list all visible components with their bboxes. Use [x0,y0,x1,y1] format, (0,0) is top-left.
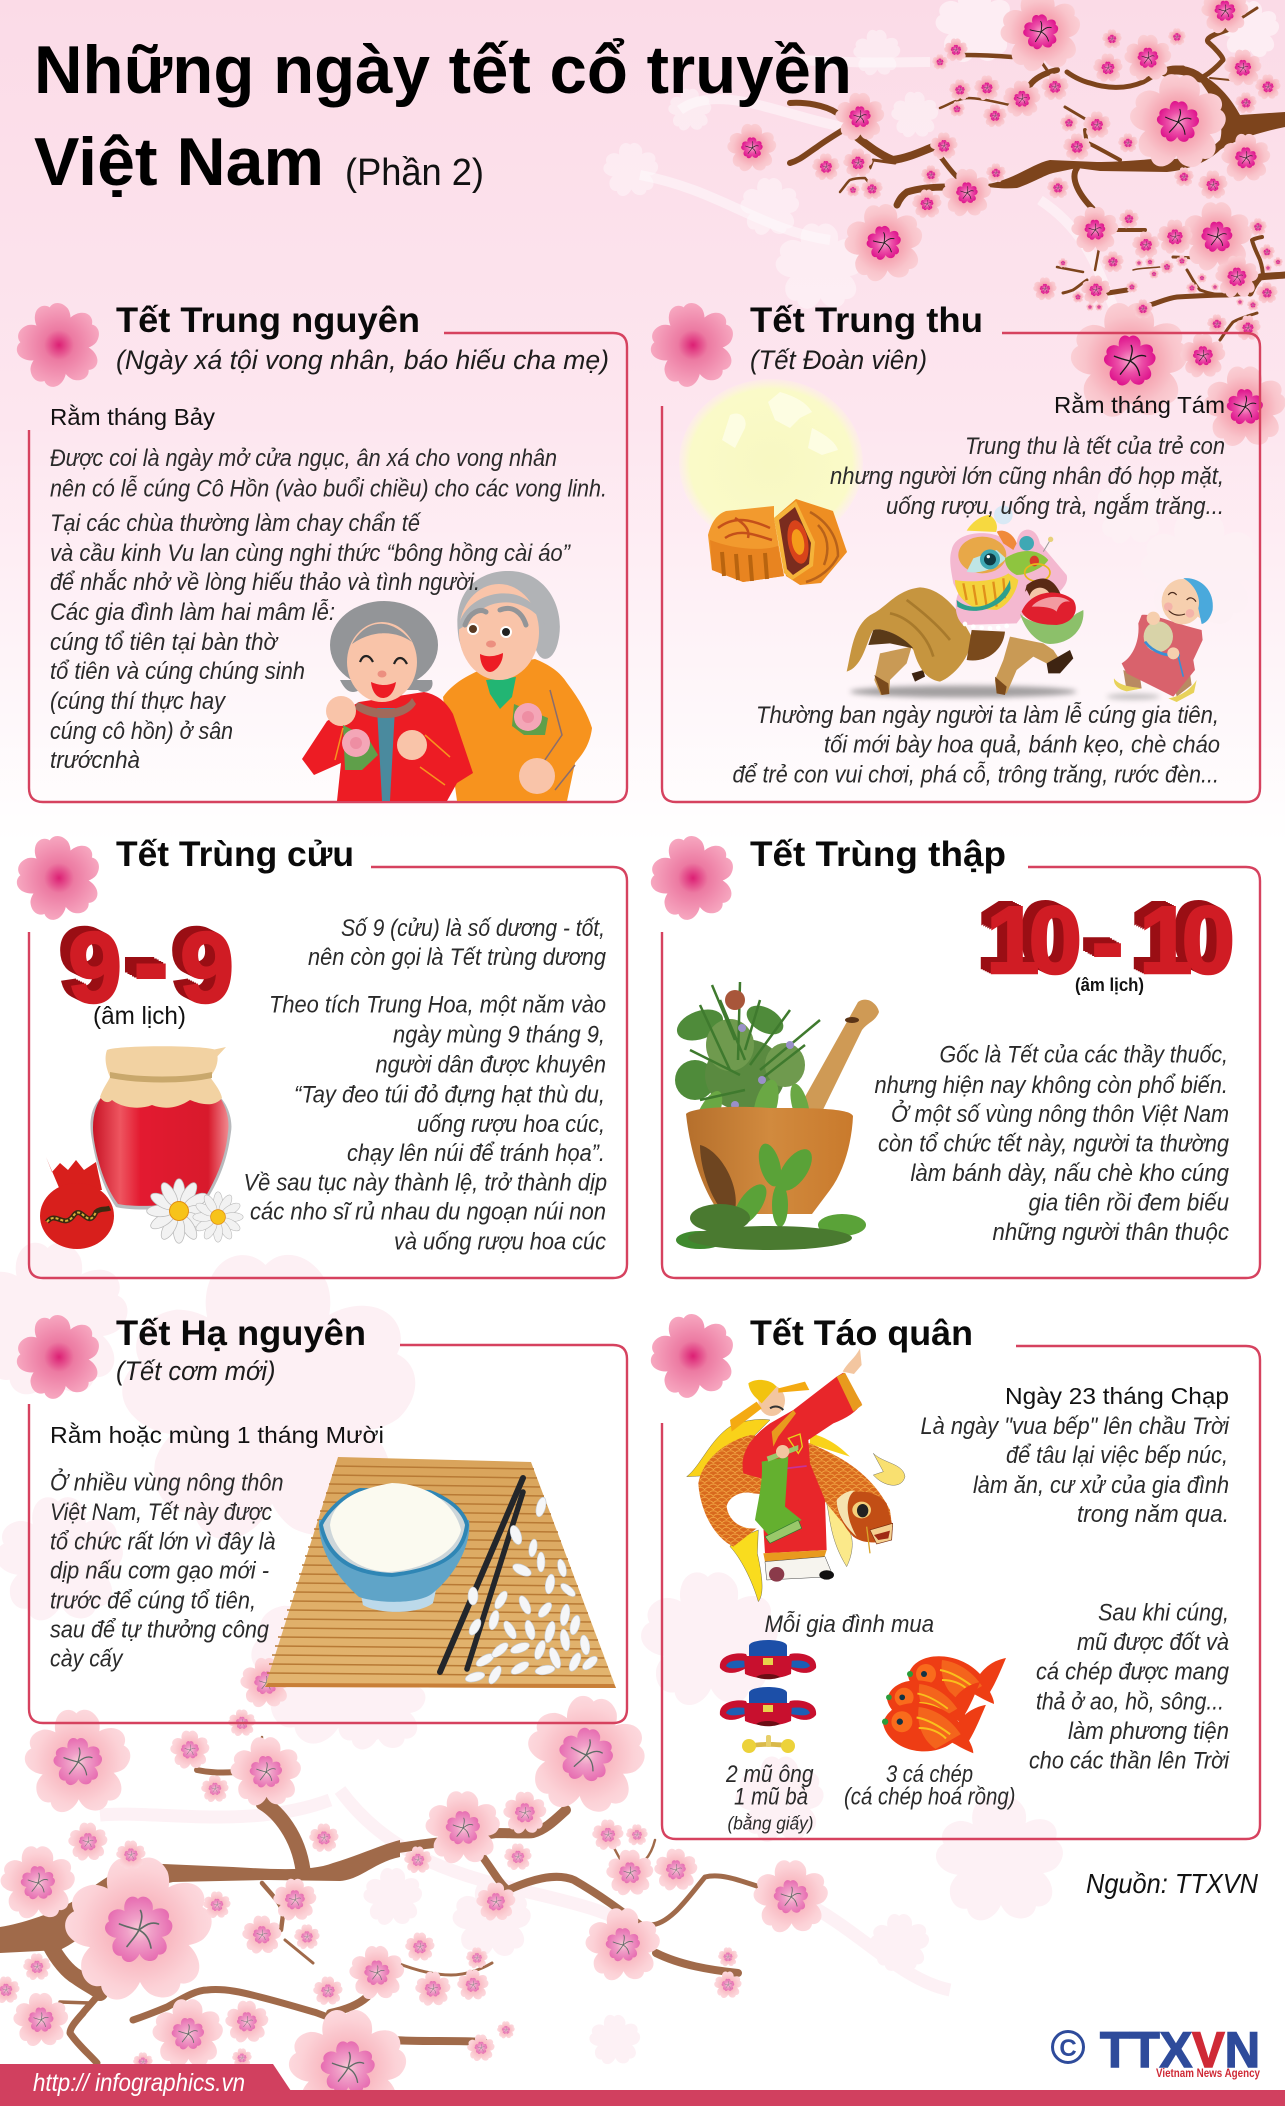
date: Rằm tháng Tám [1054,392,1225,418]
caption: hats [725,1761,814,1834]
panel: Tết Trung nguyên [6,295,627,802]
date: Rằm tháng Bảy [50,404,216,430]
illustration: mooncake [708,499,847,585]
body text: chạy lên núi để tránh họa”. [347,1140,605,1167]
illustration: wine jar [90,1046,231,1210]
body text: Trung thu là tết của trẻ con [965,433,1225,460]
body text: để trẻ con vui chơi, phá cỗ, trông trăng, rước đèn... [732,760,1219,788]
body text: Việt Nam, Tết này được [50,1499,272,1526]
panel: Tết Trùng thập [640,828,1260,1278]
body text: Về sau tục này thành lệ, trở thành dịp [244,1170,607,1196]
body text: trong năm qua. [1077,1501,1229,1528]
icon: paper hats [720,1640,816,1753]
body text: tổ chức rất lớn vì đây là [50,1528,276,1556]
body text: và cầu kinh Vu lan cùng nghi thức “bông hồng cài áo” [50,540,571,567]
caption: hats: 2 mũ ông [725,1761,814,1788]
body text: Là ngày "vua bếp" lên chầu Trời [920,1413,1230,1440]
icon: pink flower [6,295,112,398]
body text: Theo tích Trung Hoa, một năm vào [269,992,606,1018]
big date: 9-9: 9 [180,912,234,1024]
footer url: http:// infographics.vn [33,2069,245,2097]
icon: pink flower [640,828,746,931]
body text: Các gia đình làm hai mâm lễ: [50,598,335,626]
body text: còn tổ chức tết này, người ta thường [878,1130,1230,1158]
body text: (cúng thí thực hay [50,688,227,715]
body text: nhưng người lớn cũng nhân đó họp mặt, [830,463,1224,490]
panel: Tết Táo quân [640,1306,1260,1839]
body text: uống rượu hoa cúc, [417,1111,605,1138]
big date: 9-9: - [132,888,170,1034]
illustration: herbs in mortar [673,982,879,1250]
source: Nguồn: TTXVN [1086,1868,1259,1899]
icon: pink flower [640,1306,746,1409]
body text: nên còn gọi là Tết trùng dương [308,944,607,971]
panel: Tết Trùng cửu [6,828,627,1278]
caption: each family buys: Mỗi gia đình mua [764,1610,934,1638]
body text: mũ được đốt và [1077,1629,1229,1656]
icon: three red carp [882,1656,1006,1753]
heading: Tết Táo quân [750,1314,973,1353]
body text: tối mới bày hoa quả, bánh kẹo, chè cháo [824,732,1220,758]
body text: các nho sĩ rủ nhau du ngoạn núi non [250,1198,606,1226]
body text: trướcnhà [50,747,140,774]
illustration: full moon [679,379,863,547]
body text [50,1468,284,1672]
decoration: top-right blossom branch [726,0,1285,450]
footer bar [0,2064,1285,2106]
illustration: lion dance [847,506,1083,698]
caption: carp [844,1761,1016,1810]
title: Những ngày tết cổ truyền [34,32,852,108]
body text [732,433,1225,788]
icon: pink flower [6,1307,112,1410]
body text: cúng cô hồn) ở sân [50,718,233,745]
caption: carp: (cá chép hoá rồng) [844,1784,1016,1810]
body text: cày cấy [50,1646,124,1672]
body text: làm bánh dày, nấu chè kho cúng [910,1160,1230,1187]
subtitle: (Tết Đoàn viên) [750,345,927,375]
big date: 10-10: 10 [986,887,1082,994]
body text: người dân được khuyên [376,1052,606,1078]
body text: cho các thần lên Trời [1029,1748,1230,1774]
illustration: bamboo mat with rice bowl and chopsticks [265,1457,616,1688]
body text: Gốc là Tết của các thầy thuốc, [940,1042,1228,1068]
body text: sau để tự thưởng công [50,1616,270,1644]
heading: Tết Trung nguyên [116,301,420,340]
subtitle: (Ngày xá tội vong nhân, báo hiếu cha mẹ) [116,345,609,375]
date label: (âm lịch) [1075,975,1144,995]
date: Ngày 23 tháng Chạp [1005,1383,1229,1409]
heading: Tết Trung thu [750,301,983,340]
heading: Tết Trùng cửu [116,835,354,874]
body text: những người thân thuộc [992,1219,1229,1246]
big date: 9-9: 9 [68,912,122,1024]
decoration: bottom-left blossom branch [0,1658,831,2106]
title: (Phần 2) [345,152,484,194]
title [34,32,852,200]
body text [920,1413,1230,1774]
big date: 10-10: 10 [1139,887,1235,994]
body text: làm ăn, cư xử của gia đình [973,1472,1229,1499]
big date: 10-10 [986,877,1235,1005]
title: Việt Nam [34,124,324,200]
body text: cá chép được mang [1036,1658,1230,1686]
body text: Sau khi cúng, [1098,1600,1229,1626]
body text: dịp nấu cơm gạo mới - [50,1558,269,1584]
icon: pink flower [640,295,746,398]
big date: 9-9 [68,888,234,1034]
logo: TTXVN: Vietnam News Agency [1156,2066,1260,2080]
illustration: chrysanthemums [147,1179,243,1243]
body text: để nhắc nhở về lòng hiếu thảo và tình người. [50,569,480,596]
date: Rằm hoặc mùng 1 tháng Mười [50,1422,384,1448]
body text [874,1042,1230,1246]
illustration: red dragon pouch [40,1157,114,1249]
body text [244,915,607,1256]
body text: Ở nhiều vùng nông thôn [50,1468,284,1496]
caption: hats: 1 mũ bà [734,1784,808,1810]
body text: trước để cúng tổ tiên, [50,1588,256,1614]
body text: nên có lễ cúng Cô Hồn (vào buổi chiều) cho các vong linh. [50,474,607,502]
body text: gia tiên rồi đem biếu [1028,1190,1229,1216]
panel: Tết Trung thu [640,295,1260,802]
heading: Tết Hạ nguyên [116,1314,366,1353]
caption: carp: 3 cá chép [886,1761,973,1788]
body text: Tại các chùa thường làm chay chẩn tế [50,510,421,537]
body text: và uống rượu hoa cúc [394,1228,606,1256]
logo: TTXVN: TTXVN [1100,2022,1260,2078]
body text: để tâu lại việc bếp núc, [1006,1442,1228,1469]
body text: Thường ban ngày người ta làm lễ cúng gia tiên, [756,701,1219,729]
illustration: kitchen god riding a carp [687,1348,905,1602]
logo: TTXVN: C [1059,2035,1077,2062]
big date: 10-10: - [1090,877,1125,1005]
subtitle: (Tết cơm mới) [116,1356,276,1386]
date label: (âm lịch) [93,1002,186,1030]
body text [50,445,607,774]
icon: pink flower [6,828,112,931]
body text: cúng tổ tiên tại bàn thờ [50,629,279,656]
illustration: elderly couple [302,571,592,801]
body text: tổ tiên và cúng chúng sinh [50,658,305,685]
body text: Số 9 (cửu) là số dương - tốt, [341,915,605,942]
body text: “Tay đeo túi đỏ đựng hạt thù du, [294,1082,605,1108]
caption: hats: (bằng giấy) [728,1814,814,1834]
illustration: child with fan [1107,578,1213,702]
body text: làm phương tiện [1068,1718,1229,1745]
body text: ngày mùng 9 tháng 9, [393,1022,605,1048]
body text: nhưng hiện nay không còn phổ biến. [874,1072,1228,1099]
heading: Tết Trùng thập [750,835,1006,874]
body text: thả ở ao, hồ, sông... [1036,1688,1224,1716]
body text: Được coi là ngày mở cửa ngục, ân xá cho vong nhân [50,445,557,472]
body text: uống rượu, uống trà, ngắm trăng... [886,493,1224,520]
body text: Ở một số vùng nông thôn Việt Nam [891,1099,1229,1128]
panel: Tết Hạ nguyên [6,1307,627,1723]
